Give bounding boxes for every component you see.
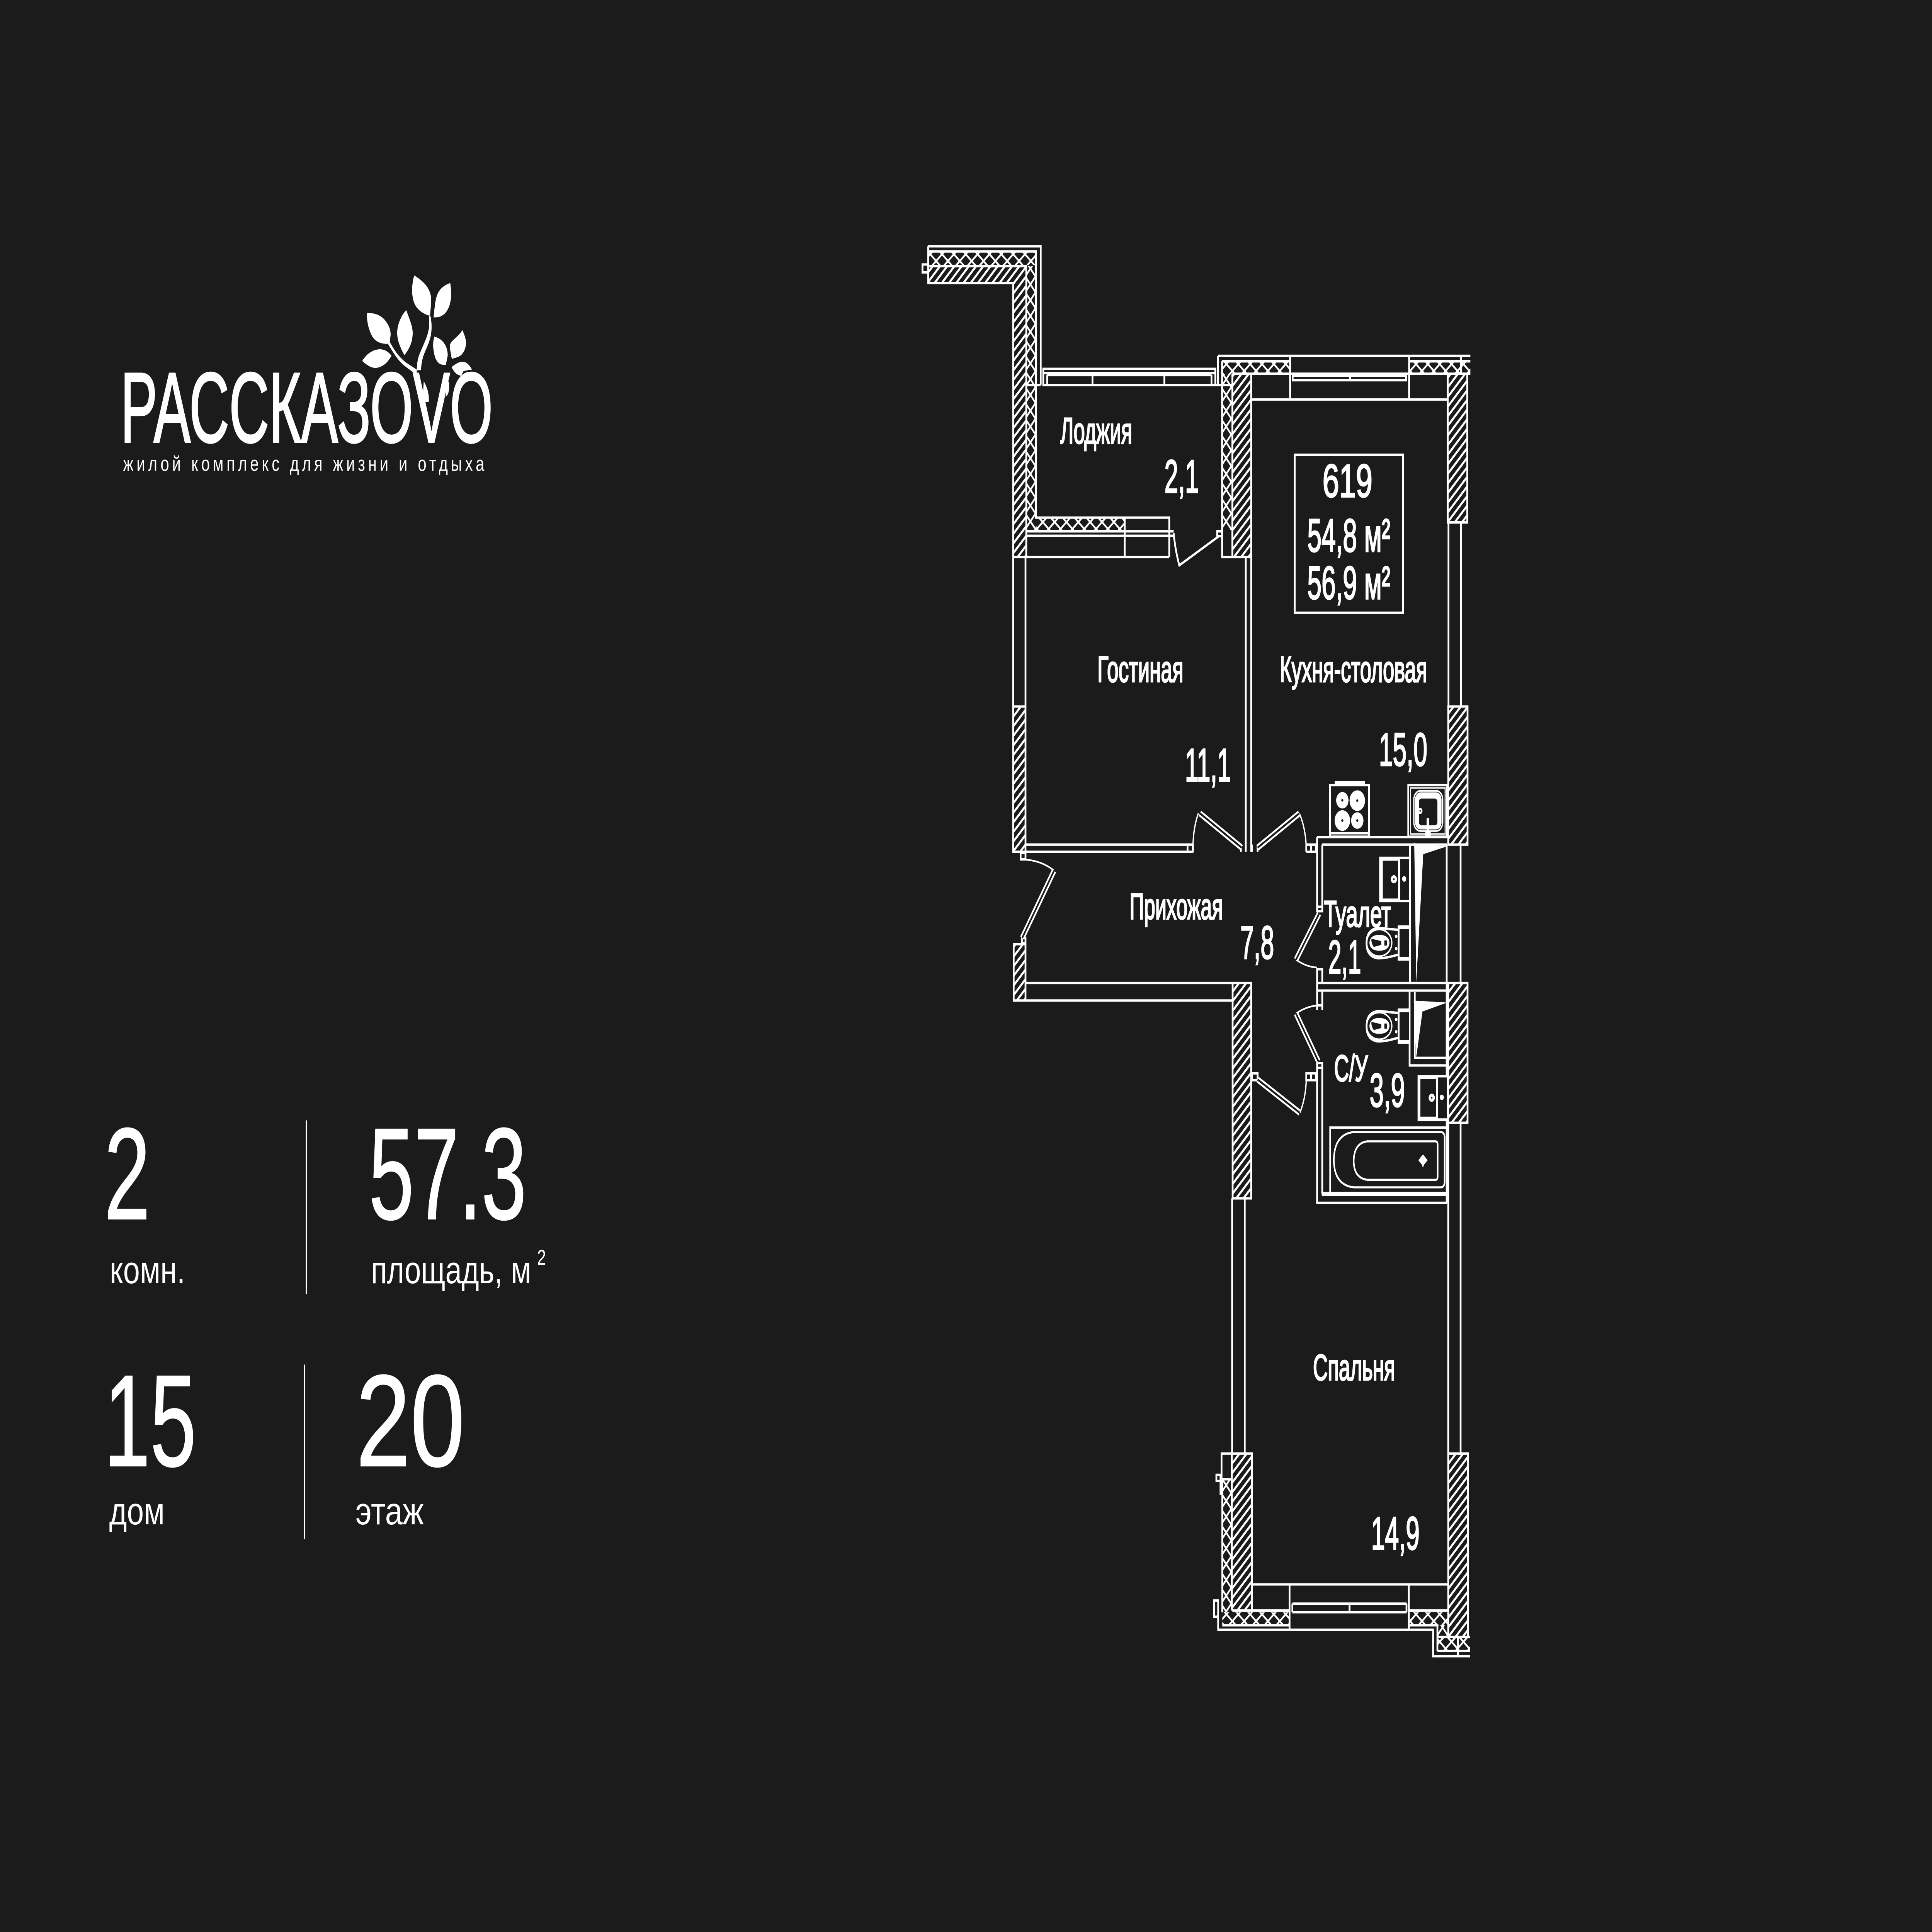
apartment number box <box>1295 454 1403 613</box>
stats: area: 57.3 <box>369 1101 527 1247</box>
stats: rooms: комн. <box>110 1248 185 1291</box>
icon: stove <box>1330 781 1369 837</box>
stats: rooms: 2 <box>104 1101 150 1247</box>
room label: kitchen <box>1280 649 1427 776</box>
room label: bedroom <box>1313 1347 1420 1560</box>
stats: floor: этаж <box>355 1489 424 1532</box>
room label: bedroom: Спальня <box>1313 1347 1395 1388</box>
room label: hallway: 7,8 <box>1240 916 1274 969</box>
room label: bathroom: С/У <box>1334 1047 1368 1089</box>
logo tagline: жилой комплекс для жизни и отдыха <box>123 452 485 475</box>
door: entrance <box>1020 859 1054 938</box>
apartment number box: 56,9 м² <box>1307 556 1390 609</box>
logo: leaves branch icon <box>362 276 472 421</box>
room label: hallway <box>1129 886 1274 969</box>
room label: toilet: Туалет <box>1324 893 1391 935</box>
icon: bathroom toilet <box>1367 1009 1410 1044</box>
room label: bathroom: 3,9 <box>1370 1064 1405 1117</box>
stats: building: дом <box>109 1489 165 1532</box>
stats: area: площадь, м <box>371 1248 531 1291</box>
room label: living room <box>1097 649 1231 791</box>
door: bathroom <box>1296 1005 1318 1061</box>
divider <box>304 1365 305 1539</box>
door: bedroom <box>1258 1080 1306 1113</box>
room label: kitchen: 15,0 <box>1379 723 1427 776</box>
apartment number box: 54,8 м² <box>1307 509 1390 562</box>
room label: bedroom: 14,9 <box>1371 1507 1420 1560</box>
room label: loggia: Лоджия <box>1060 411 1132 451</box>
walls: concrete hatching <box>928 266 1468 1636</box>
logo wordmark: РАССКАЗОVО <box>121 352 493 463</box>
walls: insulation cross hatching <box>928 252 1470 1651</box>
ventilation shafts <box>1414 842 1447 1057</box>
room label: living room: 11,1 <box>1185 739 1231 791</box>
door: living room <box>1193 813 1242 848</box>
stats: area: 2 <box>537 1246 546 1269</box>
room label: hallway: Прихожая <box>1129 886 1223 927</box>
icon: toilet <box>1367 925 1410 961</box>
divider <box>306 1121 307 1294</box>
floor plan <box>922 246 1470 1656</box>
room label: kitchen: Кухня-столовая <box>1280 649 1427 690</box>
logo <box>121 276 493 475</box>
room label: loggia: 2,1 <box>1164 450 1199 503</box>
room label: loggia <box>1060 411 1199 503</box>
room label: living room: Гостиная <box>1097 649 1184 690</box>
stats: floor: 20 <box>356 1348 465 1494</box>
room label: toilet <box>1324 893 1391 983</box>
room label: toilet: 2,1 <box>1328 930 1361 983</box>
stats: building: 15 <box>104 1348 196 1494</box>
room label: bathroom <box>1334 1047 1405 1117</box>
door: kitchen <box>1258 813 1306 848</box>
icon: bathroom sink <box>1418 1075 1447 1121</box>
icon: kitchen sink <box>1408 785 1447 837</box>
icon: bathtub <box>1322 1128 1447 1196</box>
icon: toilet room sink <box>1379 857 1410 902</box>
door: toilet <box>1296 913 1319 968</box>
door: loggia <box>1173 533 1219 565</box>
apartment number box: 619 <box>1323 454 1372 507</box>
stats: building <box>104 1348 196 1532</box>
walls: outlines <box>922 246 1470 1656</box>
stats: rooms <box>104 1101 185 1291</box>
